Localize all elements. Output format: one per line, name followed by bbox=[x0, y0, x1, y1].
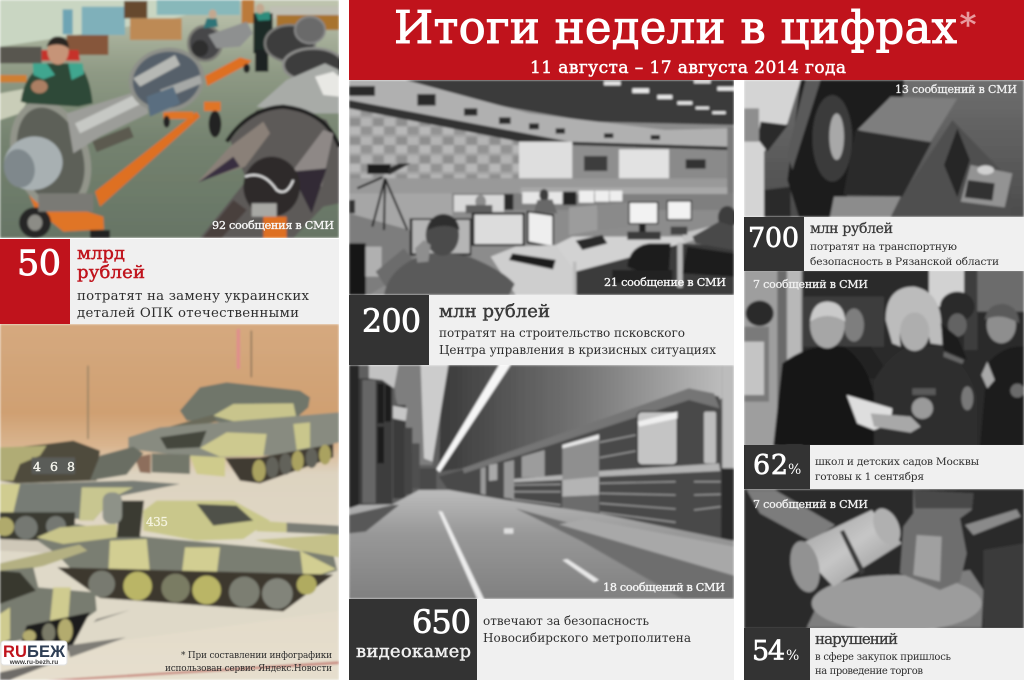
description: Центра управления в кризисных ситуациях bbox=[439, 343, 716, 357]
number 62: 62 bbox=[753, 450, 788, 481]
title asterisk: * bbox=[960, 6, 976, 44]
percent sign: % bbox=[786, 648, 799, 664]
panel: 50 bn roubles bbox=[0, 239, 339, 324]
percent sign: % bbox=[788, 462, 801, 478]
logo: RUБЕЖ: www.ru-bezh.ru bbox=[9, 659, 58, 666]
description: готовы к 1 сентября bbox=[815, 471, 924, 483]
caption: 18 messages: 18 сообщений в СМИ bbox=[603, 581, 725, 594]
panel: 62 percent bbox=[744, 445, 1024, 489]
title: Итоги недели в цифрах bbox=[394, 1, 957, 54]
footnote: использован сервис Яндекс.Новости bbox=[165, 664, 332, 674]
photo: tanks bbox=[0, 324, 339, 680]
number 200: 200 bbox=[362, 304, 421, 340]
caption: 21 messages: 21 сообщение в СМИ bbox=[604, 276, 726, 289]
title banner bbox=[349, 0, 1024, 80]
panel: 50 bn roubles: рублей bbox=[77, 262, 145, 283]
panel: 650 video cameras bbox=[349, 599, 734, 680]
unit label: видеокамер bbox=[356, 641, 471, 662]
number 54: 54 bbox=[752, 636, 785, 667]
description: отвечают за безопасность bbox=[483, 614, 649, 628]
logo: RUБЕЖ: RUБЕЖ bbox=[3, 643, 65, 661]
description: на проведение торгов bbox=[815, 666, 923, 677]
number 650: 650 bbox=[412, 603, 471, 641]
caption: 7 messages: 7 сообщений в СМИ bbox=[753, 498, 868, 511]
unit heading: нарушений bbox=[815, 630, 898, 648]
number 50: 50 bbox=[17, 244, 61, 284]
description: Новосибирского метрополитена bbox=[483, 631, 691, 645]
date range: 11 августа – 17 августа 2014 года bbox=[530, 58, 846, 78]
photo: truck wheel and laptop bbox=[744, 80, 1024, 217]
description: потратят на замену украинских bbox=[77, 289, 310, 304]
panel: 200 mln roubles bbox=[349, 295, 734, 365]
description: деталей ОПК отечественными bbox=[77, 306, 299, 321]
caption: 7 messages: 7 сообщений в СМИ bbox=[753, 278, 868, 291]
photo: tanks: 468 bbox=[33, 459, 75, 474]
caption: 13 messages: 13 сообщений в СМИ bbox=[895, 83, 1017, 96]
panel: 54 percent bbox=[744, 628, 1024, 680]
photo: tanks: 435 bbox=[146, 515, 168, 529]
description: потратят на транспортную bbox=[810, 241, 957, 253]
logo: RUБЕЖ bbox=[1, 641, 67, 666]
photo: control room bbox=[349, 80, 737, 295]
photo: metro station bbox=[349, 365, 734, 599]
description: потратят на строительство псковского bbox=[439, 326, 685, 340]
description: в сфере закупок пришлось bbox=[815, 652, 952, 663]
photo: emergency officers bbox=[744, 270, 1024, 447]
footnote: * При составлении инфографики bbox=[181, 651, 332, 661]
photo: missile assembly workshop bbox=[0, 0, 343, 238]
caption: 92 messages: 92 сообщения в СМИ bbox=[212, 219, 334, 232]
unit heading: млн рублей bbox=[810, 221, 893, 237]
unit heading: млрд bbox=[77, 243, 125, 264]
photo: gavel bbox=[744, 489, 1024, 632]
unit heading: млн рублей bbox=[439, 301, 550, 322]
description: безопасность в Рязанской области bbox=[810, 256, 999, 268]
number 700: 700 bbox=[748, 223, 799, 254]
description: школ и детских садов Москвы bbox=[815, 456, 980, 468]
panel: 700 mln roubles bbox=[744, 217, 1024, 271]
